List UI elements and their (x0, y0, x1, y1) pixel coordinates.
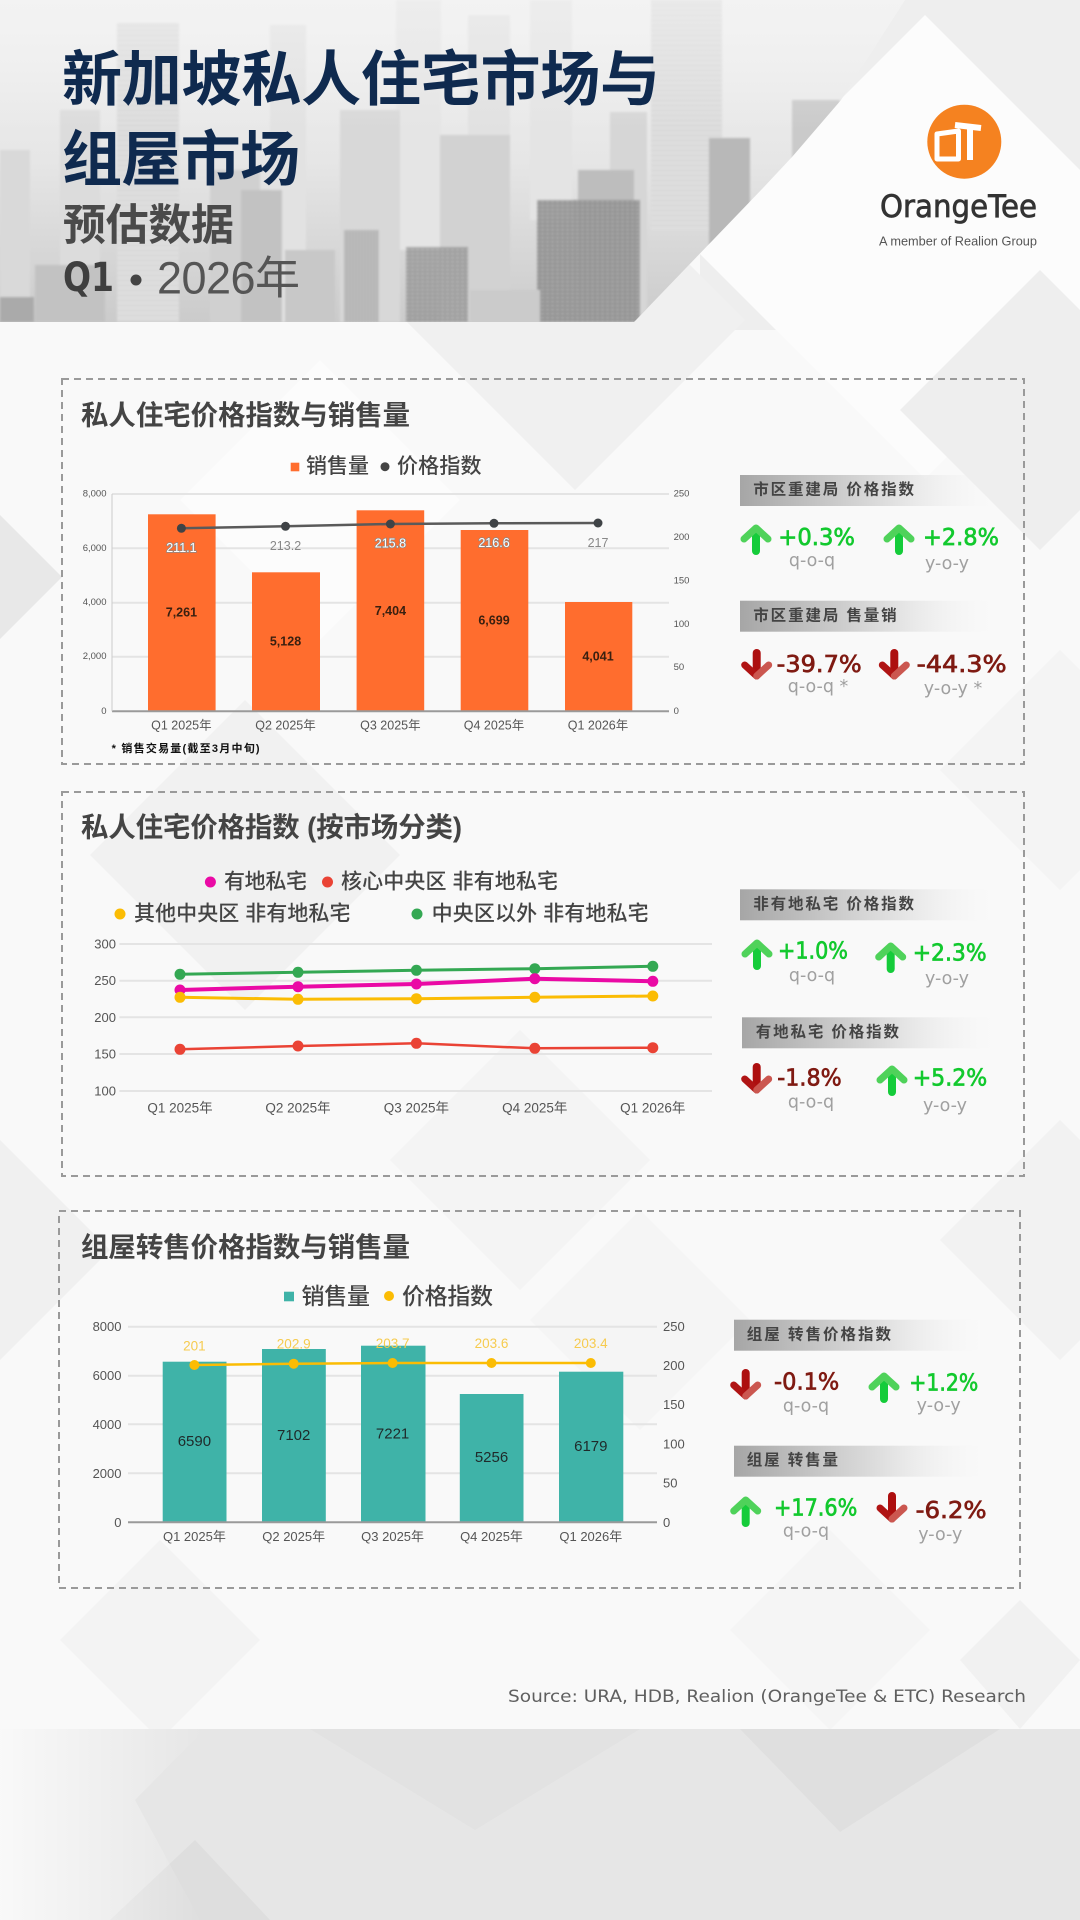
icon: up arrow (879, 946, 903, 969)
stat: non-landed y-o-y (879, 940, 987, 989)
value: -44.3% (917, 652, 1007, 678)
icon: OT monogram (937, 125, 981, 160)
combo chart: sales bars and price index line: 50 (674, 662, 684, 673)
combo chart: sales bars and price index line: 0 (101, 706, 106, 717)
label bar: URA price index (740, 475, 993, 506)
combo chart: sales bars and price index line: 213.2 (270, 539, 301, 553)
period: y-o-y * (924, 679, 982, 699)
combo chart: resale bars and price index line: Q3 2025年 (361, 1529, 424, 1544)
line chart: price index by segment: Q2 2025年 (265, 1100, 331, 1116)
label bar: URA sales: 市区重建局 售量销 (753, 606, 897, 624)
stat: resale price q-o-q (734, 1369, 839, 1417)
combo chart: sales bars and price index line: Q4 2025年 (464, 719, 524, 733)
title: 组屋市场 (62, 126, 300, 194)
line chart: price index by segment: 100 (94, 1084, 116, 1098)
stat: non-landed q-o-q (745, 939, 848, 986)
combo chart: sales bars and price index line: 7,261 (166, 606, 197, 620)
panel: private price index by market segment (62, 792, 1024, 1176)
combo chart: sales bars and price index line: 250 (674, 488, 689, 500)
period: y-o-y (925, 969, 969, 989)
value: -1.8% (777, 1065, 842, 1091)
quarter label: 2026年 (157, 252, 300, 304)
label bar: HDB resale volume: 组屋 转售量 (747, 1450, 838, 1469)
logo: OrangeTee (879, 105, 1037, 249)
stat: resale volume y-o-y (880, 1496, 987, 1545)
panel heading: 组屋转售价格指数与销售量 (81, 1232, 410, 1262)
panel: private residential price index and sales (62, 379, 1024, 764)
icon: up arrow (745, 943, 769, 966)
line chart: price index by segment: 300 (94, 936, 116, 952)
combo chart: resale bars and price index line: 203.7 (376, 1336, 409, 1351)
period: y-o-y (925, 554, 969, 574)
combo chart: sales bars and price index line: 150 (674, 576, 689, 586)
icon: down arrow (745, 1067, 769, 1090)
combo chart: sales bars and price index line (83, 488, 689, 733)
stat: price index q-o-q (744, 525, 855, 571)
combo chart: resale bars and price index line: 4000 (93, 1417, 122, 1432)
combo chart: sales bars and price index line: 211.1 (166, 541, 197, 555)
combo chart: resale bars and price index line: 6000 (93, 1368, 122, 1383)
combo chart: resale bars and price index line: Q2 2025年 (262, 1529, 325, 1544)
chart legend (114, 870, 649, 926)
chart legend: 价格指数 (402, 1283, 493, 1309)
combo chart: resale bars and price index line: 6590 (178, 1433, 211, 1450)
combo chart: resale bars and price index line: 7221 (376, 1426, 409, 1442)
brand name: OrangeTee (880, 189, 1037, 225)
quarter label (63, 252, 300, 304)
combo chart: resale bars and price index line: 50 (663, 1476, 677, 1490)
combo chart: sales bars and price index line: 215.8 (375, 537, 406, 551)
icon: down arrow (882, 653, 906, 676)
combo chart: sales bars and price index line: 216.6 (478, 536, 510, 550)
value: +2.8% (923, 525, 999, 551)
chart legend: 其他中央区 非有地私宅 (134, 902, 350, 926)
combo chart: sales bars and price index line: Q1 2025年 (151, 719, 212, 733)
combo chart: resale bars and price index line: 0 (663, 1515, 670, 1530)
label bar: URA sales (740, 601, 993, 632)
value: +1.0% (778, 939, 848, 965)
combo chart: resale bars and price index line: Q1 2025年 (163, 1529, 226, 1544)
source note: Source: URA, HDB, Realion (OrangeTee & ETC) Research (508, 1687, 1026, 1706)
icon: up arrow (872, 1376, 896, 1399)
icon: down arrow (734, 1373, 758, 1396)
combo chart: resale bars and price index line: 100 (663, 1436, 685, 1452)
combo chart: resale bars and price index line: 203.4 (574, 1336, 608, 1351)
line chart: price index by segment: Q4 2025年 (502, 1100, 567, 1116)
stat: landed y-o-y (880, 1065, 987, 1116)
combo chart: sales bars and price index line: 100 (674, 619, 689, 630)
combo chart: resale bars and price index line: 5256 (475, 1449, 508, 1466)
icon: up arrow (887, 528, 911, 551)
combo chart: sales bars and price index line: 0 (674, 706, 679, 717)
combo chart: resale bars and price index line (93, 1319, 685, 1544)
combo chart: resale bars and price index line: Q4 2025年 (460, 1529, 523, 1544)
icon: down arrow (745, 653, 769, 676)
period: q-o-q (788, 1093, 834, 1113)
combo chart: sales bars and price index line: 4,041 (582, 650, 614, 664)
stat: price index y-o-y (887, 525, 999, 574)
combo chart: resale bars and price index line: 203.6 (475, 1336, 508, 1351)
tagline: A member of Realion Group (879, 235, 1037, 249)
combo chart: resale bars and price index line: 250 (663, 1319, 685, 1334)
header skyline image (0, 0, 905, 322)
combo chart: resale bars and price index line: 201 (183, 1338, 206, 1354)
value: +0.3% (778, 525, 855, 551)
title (62, 46, 660, 194)
label bar: non-landed price index: 非有地私宅 价格指数 (753, 894, 914, 913)
subtitle: 预估数据 (63, 202, 234, 250)
combo chart: resale bars and price index line: 7102 (277, 1427, 310, 1444)
combo chart: sales bars and price index line: Q3 2025年 (360, 719, 421, 733)
footnote: * 销售交易量(截至3月中旬) (112, 741, 260, 755)
label bar: non-landed price index (740, 889, 993, 920)
quarter label: Q1 (63, 255, 114, 301)
line chart: price index by segment: 200 (94, 1010, 116, 1025)
combo chart: sales bars and price index line: 2,000 (83, 651, 106, 662)
period: y-o-y (918, 1525, 962, 1545)
combo chart: resale bars and price index line: 200 (663, 1358, 685, 1373)
stat: sales y-o-y (882, 652, 1007, 699)
combo chart: sales bars and price index line: Q1 2026年 (568, 719, 628, 733)
value: +2.3% (913, 940, 987, 966)
line chart: price index by segment: 150 (94, 1046, 116, 1062)
stat: landed q-o-q (745, 1065, 842, 1113)
chart legend: 销售量 (306, 455, 369, 478)
label bar: HDB resale volume (734, 1446, 984, 1477)
icon: logo circle (927, 105, 1001, 179)
period: y-o-y (917, 1396, 961, 1416)
line chart: price index by segment (94, 936, 712, 1116)
value: -6.2% (916, 1498, 987, 1524)
label bar: landed price index: 有地私宅 价格指数 (756, 1022, 899, 1041)
chart legend (291, 455, 482, 478)
icon: up arrow (734, 1500, 758, 1523)
combo chart: resale bars and price index line: 202.9 (277, 1336, 311, 1352)
combo chart: sales bars and price index line: 7,404 (375, 604, 406, 618)
icon: up arrow (744, 528, 768, 551)
icon: down arrow (880, 1496, 904, 1519)
panel heading: 私人住宅价格指数与销售量 (81, 400, 410, 430)
combo chart: sales bars and price index line: 200 (674, 532, 689, 543)
icon: up arrow (880, 1069, 904, 1092)
period: q-o-q (789, 551, 835, 571)
value: +5.2% (913, 1065, 987, 1091)
period: q-o-q (783, 1522, 829, 1542)
value: -0.1% (774, 1369, 839, 1395)
combo chart: sales bars and price index line: 6,000 (83, 543, 106, 554)
stat: sales q-o-q (745, 652, 862, 697)
panel heading: 私人住宅价格指数 (按市场分类) (81, 812, 462, 842)
stat: resale price y-o-y (872, 1370, 978, 1416)
chart legend: 价格指数 (397, 455, 482, 478)
combo chart: resale bars and price index line: 2000 (93, 1466, 122, 1481)
period: q-o-q (783, 1397, 829, 1417)
stat: resale volume q-o-q (734, 1495, 857, 1542)
period: q-o-q (789, 966, 835, 986)
chart legend (284, 1283, 493, 1309)
line chart: price index by segment: Q1 2026年 (620, 1100, 685, 1116)
value: -39.7% (777, 652, 862, 678)
chart legend: 有地私宅 (224, 870, 307, 894)
label bar: landed price index (742, 1017, 995, 1048)
combo chart: resale bars and price index line: 150 (663, 1397, 685, 1412)
value: +17.6% (774, 1495, 857, 1521)
period: y-o-y (923, 1096, 967, 1116)
combo chart: sales bars and price index line: 5,128 (270, 635, 301, 649)
chart legend: 中央区以外 非有地私宅 (432, 902, 649, 926)
combo chart: sales bars and price index line: 217 (588, 536, 608, 550)
label bar: HDB resale price index (734, 1320, 984, 1351)
combo chart: sales bars and price index line: 4,000 (83, 597, 106, 608)
chart legend: 销售量 (302, 1283, 370, 1309)
combo chart: sales bars and price index line: 6,699 (478, 613, 510, 627)
combo chart: resale bars and price index line: 6179 (574, 1438, 607, 1455)
line chart: price index by segment: Q3 2025年 (384, 1100, 449, 1116)
label bar: URA price index: 市区重建局 价格指数 (753, 480, 914, 498)
combo chart: resale bars and price index line: 0 (114, 1515, 122, 1530)
combo chart: sales bars and price index line: Q2 2025年 (255, 719, 316, 733)
line chart: price index by segment: Q1 2025年 (147, 1100, 213, 1116)
combo chart: resale bars and price index line: 8000 (93, 1319, 122, 1334)
period: q-o-q * (788, 677, 849, 697)
combo chart: sales bars and price index line: 8,000 (83, 488, 106, 500)
combo chart: resale bars and price index line: Q1 2026年 (559, 1529, 622, 1544)
title: 新加坡私人住宅市场与 (62, 46, 660, 114)
line chart: price index by segment: 250 (94, 973, 116, 988)
label bar: HDB resale price index: 组屋 转售价格指数 (747, 1324, 891, 1344)
value: +1.2% (909, 1370, 978, 1396)
panel: HDB resale price index and sales (59, 1211, 1020, 1588)
chart legend: 核心中央区 非有地私宅 (341, 870, 558, 894)
